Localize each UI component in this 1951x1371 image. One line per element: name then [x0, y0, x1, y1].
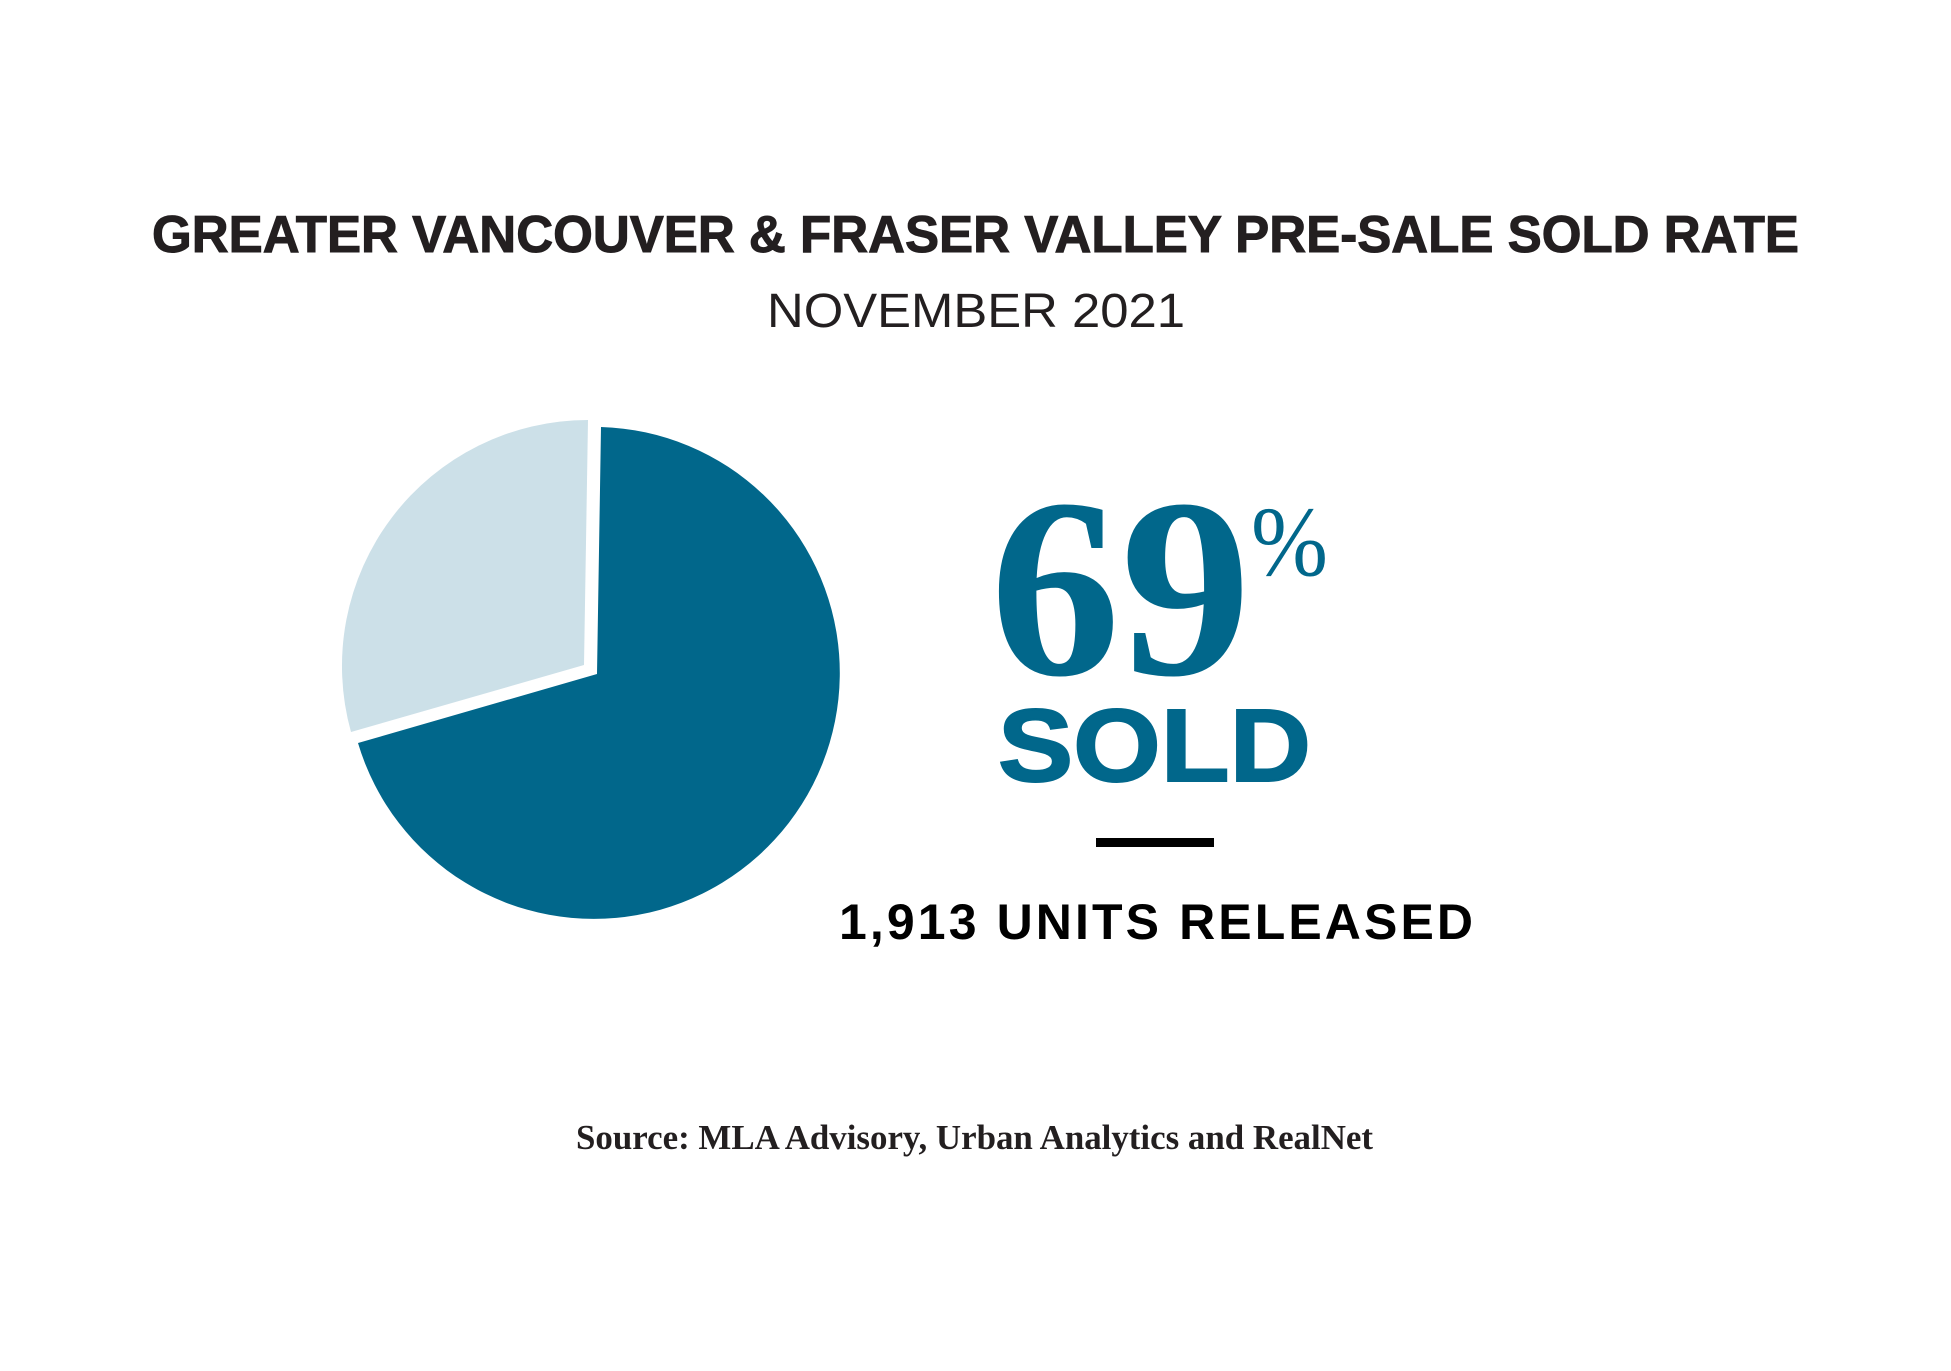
divider rule	[1096, 838, 1214, 847]
big number 69: 69	[990, 447, 1251, 730]
pie slice: sold 69%	[358, 427, 840, 919]
source note: Source: MLA Advisory, Urban Analytics and RealNet	[576, 1118, 1373, 1157]
sold label: SOLD	[998, 688, 1311, 803]
pie chart	[342, 420, 840, 919]
subtitle: date: NOVEMBER 2021	[767, 285, 1185, 338]
title: GREATER VANCOUVER & FRASER VALLEY PRE-SALE SOLD RATE	[152, 206, 1799, 264]
units released: 1,913 UNITS RELEASED	[839, 894, 1473, 950]
pie slice: unsold	[342, 420, 588, 732]
percent sign: %	[1251, 486, 1328, 597]
